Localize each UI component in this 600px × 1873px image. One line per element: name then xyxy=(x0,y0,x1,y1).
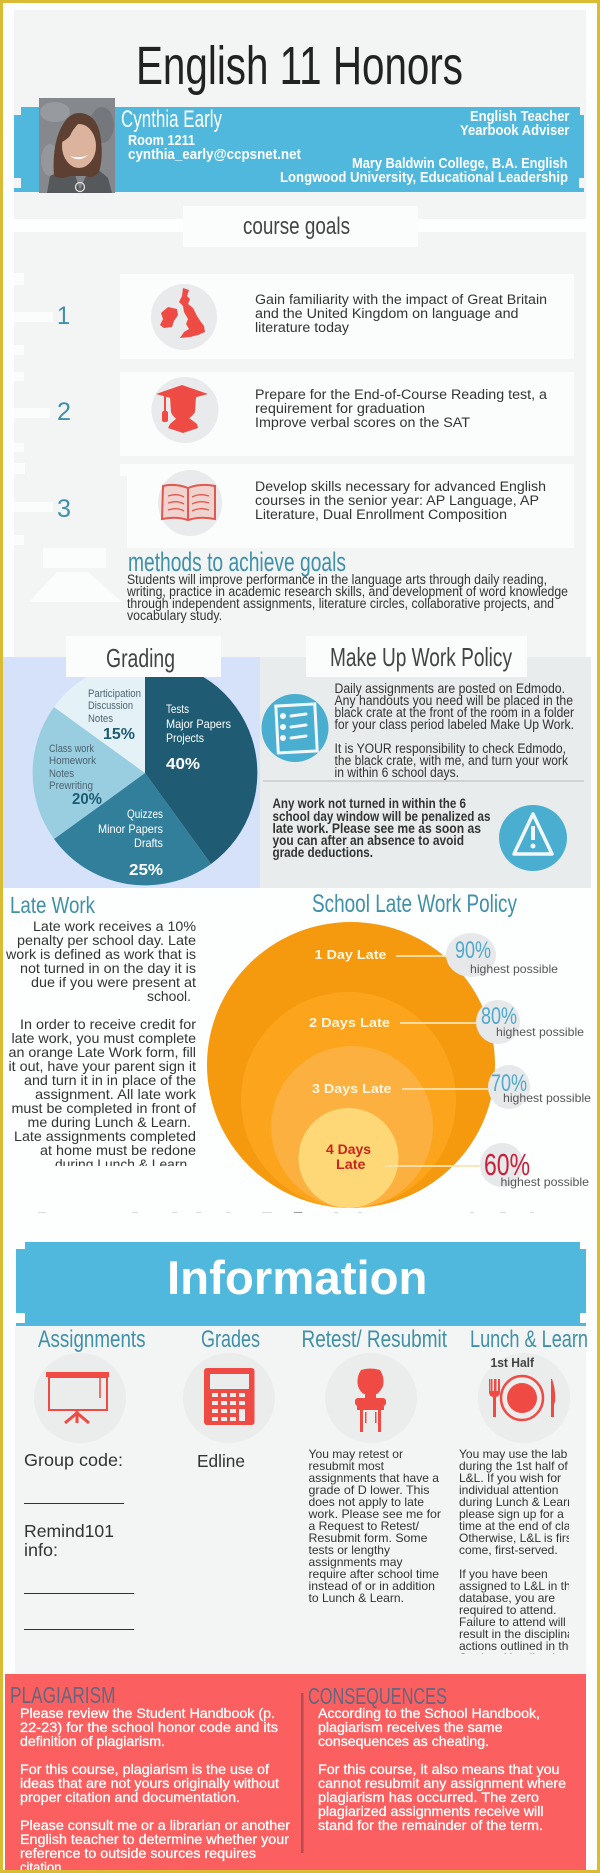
consequences column: cannot resubmit any assignment where xyxy=(318,1775,566,1791)
retest text: instead of or in addition xyxy=(308,1579,435,1593)
retest text: tests or lengthy xyxy=(308,1543,390,1557)
icon: warning xyxy=(499,805,567,871)
make up instructions: Any handouts you need will be placed in the xyxy=(334,693,573,708)
retest text: does not apply to late xyxy=(308,1495,424,1509)
lunch and learn text: individual attention xyxy=(459,1483,558,1497)
consequences column: CONSEQUENCES xyxy=(308,1683,447,1709)
retest text: You may retest or xyxy=(308,1447,403,1461)
3 days late: 3 Days Late xyxy=(312,1081,392,1096)
information section panel xyxy=(15,1325,586,1674)
3 days late xyxy=(312,1070,591,1105)
retest text: grade of D lower. This xyxy=(308,1483,430,1497)
late work warning text: you can after an absence to avoid xyxy=(272,833,464,848)
lunch and learn text: Otherwise, L&L is first xyxy=(459,1531,576,1545)
icon: plate and cutlery xyxy=(489,1376,555,1420)
2 days late: 80% xyxy=(481,1003,517,1030)
slice labels: 40% xyxy=(166,756,200,773)
slice labels: Drafts xyxy=(134,836,163,850)
teacher roles and degrees: Longwood University, Educational Leadership xyxy=(280,169,568,186)
lunch and learn text: assigned to L&L in the xyxy=(459,1579,578,1593)
teacher name and contact: Cynthia Early xyxy=(121,106,222,133)
heading: school late work policy: School Late Work Policy xyxy=(312,890,517,918)
consequences column: According to the School Handbook, xyxy=(318,1705,540,1721)
slice labels: Homework xyxy=(49,755,96,767)
goal 3: 3 xyxy=(57,495,71,523)
column: retest resubmit xyxy=(302,1326,447,1605)
plagiarism column: PLAGIARISM xyxy=(10,1682,116,1708)
late work text: late work, you must complete xyxy=(12,1030,196,1046)
column: assignments xyxy=(24,1326,146,1630)
late work text: In order to receive credit for xyxy=(20,1016,196,1032)
teacher name and contact: cynthia_early@ccpsnet.net xyxy=(128,146,301,163)
late work text: it out, have your parent sign it xyxy=(8,1058,196,1074)
plagiarism column xyxy=(10,1682,290,1873)
make up instructions: in within 6 school days. xyxy=(334,765,459,780)
goal 3 text: Literature, Dual Enrollment Composition xyxy=(255,507,507,522)
assignments info: Group code: xyxy=(24,1450,123,1470)
column: lunch and learn: 1st Half xyxy=(490,1356,535,1370)
late work warning text: late work. Please see me as soon as xyxy=(272,821,481,836)
plagiarism column: English teacher to determine whether your xyxy=(20,1831,289,1847)
retest text xyxy=(307,1447,441,1605)
slice labels: Notes xyxy=(49,768,74,780)
information banner: Information xyxy=(167,1251,428,1304)
late work text: Late Work xyxy=(10,892,95,918)
connector lines xyxy=(385,956,488,1166)
column: lunch and learn xyxy=(459,1326,588,1665)
column: grades: Grades xyxy=(201,1326,260,1353)
late work text: during Lunch & Learn. xyxy=(55,1156,191,1172)
2 days late: 2 Days Late xyxy=(309,1015,390,1030)
plagiarism column: reference to outside sources requires xyxy=(20,1845,256,1861)
1 day late: highest possible xyxy=(470,962,558,976)
teacher roles and degrees xyxy=(280,108,570,186)
goal 1 text: Gain familiarity with the impact of Great Britain xyxy=(255,292,547,307)
methods to achieve goals: methods to achieve goals xyxy=(128,547,346,577)
column: assignments: Assignments xyxy=(38,1326,146,1353)
column: grades xyxy=(183,1326,275,1471)
slice labels: Discussion xyxy=(88,700,133,712)
4 days late: 4 Days xyxy=(326,1141,371,1157)
goal 3 text xyxy=(255,479,546,522)
goal 3 text: Develop skills necessary for advanced English xyxy=(255,479,546,494)
late work text: Late assignments completed xyxy=(14,1128,196,1144)
late work warning text: grade deductions. xyxy=(272,845,373,860)
methods to achieve goals: Students will improve performance in the language arts through daily reading, xyxy=(127,572,547,587)
lunch and learn text: required to attend. xyxy=(459,1603,556,1617)
late work text: school. xyxy=(147,988,191,1004)
icon: chair xyxy=(355,1368,386,1432)
lunch and learn text: come, first-served. xyxy=(459,1543,558,1557)
late work warning text: school day window will be penalized as xyxy=(272,809,490,824)
methods to achieve goals: writing, practice in academic research skills, and development of word knowledge xyxy=(126,584,568,599)
4 days late xyxy=(326,1141,589,1189)
methods to achieve goals: vocabulary study. xyxy=(127,608,222,623)
heading: grading: Grading xyxy=(106,643,175,673)
teacher name and contact: Room 1211 xyxy=(128,132,195,149)
retest text: resubmit most xyxy=(308,1459,385,1473)
late work text xyxy=(5,892,197,1172)
goal 1 text: and the United Kingdom on language and xyxy=(255,306,518,321)
plagiarism column: For this course, plagiarism is the use of xyxy=(20,1761,269,1777)
slice labels: Prewriting xyxy=(49,780,93,792)
assignments info: Remind101 xyxy=(24,1521,114,1541)
lunch and learn text: L&L. If you wish for xyxy=(459,1471,561,1485)
retest text: to Lunch & Learn. xyxy=(308,1591,404,1605)
pie chart xyxy=(33,660,257,885)
retest text: assignments that have a xyxy=(308,1471,439,1485)
heading: make up work policy xyxy=(306,636,527,677)
slice labels: Notes xyxy=(88,713,113,725)
make up instructions: the black crate, with me, and turn your work xyxy=(334,753,568,768)
icon: checklist xyxy=(262,694,328,762)
heading: make up work policy: Make Up Work Policy xyxy=(330,642,512,672)
decorative white step bars xyxy=(14,273,122,602)
lunch and learn text: please sign up for a xyxy=(459,1507,564,1521)
icon: open book xyxy=(162,485,215,520)
retest text: assignments may xyxy=(308,1555,402,1569)
retest text: Resubmit form. Some xyxy=(308,1531,428,1545)
goal 3 text: courses in the senior year: AP Language, AP xyxy=(255,493,539,508)
icon: graduate xyxy=(156,385,208,433)
3 days late: 70% xyxy=(491,1070,527,1097)
slice labels: Minor Papers xyxy=(98,822,163,836)
percent badge circles xyxy=(446,933,530,1187)
panel: make up work policy xyxy=(260,636,591,888)
late work warning text xyxy=(272,796,490,860)
goal 1 xyxy=(57,274,574,359)
lunch and learn text: Student Handbook. xyxy=(459,1651,562,1665)
goal 1 text xyxy=(255,292,547,335)
goal 1: 1 xyxy=(57,302,70,330)
make up instructions xyxy=(334,681,574,780)
late work text: an orange Late Work form, fill xyxy=(8,1044,196,1060)
methods to achieve goals xyxy=(126,547,568,623)
late work text: due if you were present at xyxy=(31,974,196,990)
goal 3 xyxy=(57,464,574,548)
slice labels: Quizzes xyxy=(127,807,163,821)
assignments info xyxy=(24,1450,134,1630)
2 days late xyxy=(309,1003,584,1039)
lunch and learn text: database, you are xyxy=(459,1591,555,1605)
lunch and learn text: during Lunch & Learn, xyxy=(459,1495,577,1509)
assignments info: info: xyxy=(24,1540,58,1560)
teacher banner xyxy=(14,98,584,193)
heading: grading xyxy=(66,636,221,677)
plagiarism column: Please review the Student Handbook (p. xyxy=(20,1705,275,1721)
lunch and learn text: during the 1st half of xyxy=(459,1459,568,1473)
make up instructions: Daily assignments are posted on Edmodo. xyxy=(334,681,565,696)
teacher roles and degrees: Mary Baldwin College, B.A. English xyxy=(352,155,568,172)
4 days late: Late xyxy=(336,1156,366,1172)
4 days late: highest possible xyxy=(500,1175,589,1189)
retest text: a Request to Retest/ xyxy=(308,1519,420,1533)
concentric late work chart xyxy=(207,922,591,1208)
slice labels: Participation xyxy=(88,688,141,700)
goal 2 text: Prepare for the End-of-Course Reading test, a xyxy=(255,387,548,402)
plagiarism column: Please consult me or a librarian or another xyxy=(20,1817,290,1833)
late work text: must be completed in front of xyxy=(12,1100,196,1116)
2 days late: highest possible xyxy=(496,1025,584,1039)
slice labels: Projects xyxy=(166,731,204,745)
icon: UK map xyxy=(160,288,205,338)
goal 2 text xyxy=(255,387,548,430)
late work text: and turn it in in place of the xyxy=(24,1072,196,1088)
title: English 11 Honors xyxy=(136,36,463,96)
panel: plagiarism and consequences xyxy=(5,1674,586,1873)
late work text: work is defined as work that is xyxy=(5,946,196,962)
lunch and learn text xyxy=(459,1450,569,1654)
teacher photo xyxy=(39,98,115,193)
lunch and learn text: actions outlined in the xyxy=(459,1639,575,1653)
plagiarism column: proper citation and documentation. xyxy=(20,1789,240,1805)
plagiarism column: 22-23) for the school honor code and its xyxy=(20,1719,278,1735)
consequences column xyxy=(308,1683,566,1833)
slice labels: Major Papers xyxy=(166,717,231,731)
late work text: at home must be redone xyxy=(40,1142,196,1158)
heading: course goals: course goals xyxy=(243,213,350,240)
goal 2: 2 xyxy=(57,398,71,426)
lunch and learn text: time at the end of class. xyxy=(459,1519,586,1533)
goal 2 xyxy=(57,372,574,456)
teacher name and contact xyxy=(121,106,301,163)
panel: grading xyxy=(3,636,260,888)
1 day late xyxy=(314,937,558,976)
retest text: require after school time xyxy=(308,1567,439,1581)
late work warning text: Any work not turned in within the 6 xyxy=(272,796,466,811)
3 days late: highest possible xyxy=(503,1091,591,1105)
teacher roles and degrees: English Teacher xyxy=(470,108,570,125)
goal 2 text: Improve verbal scores on the SAT xyxy=(255,415,470,430)
late work text: Late work receives a 10% xyxy=(33,918,196,934)
lunch and learn text: You may use the lab xyxy=(459,1447,568,1461)
consequences column: consequences as cheating. xyxy=(318,1733,489,1749)
icon: projector screen xyxy=(46,1372,109,1423)
plagiarism column: definition of plagiarism. xyxy=(20,1733,165,1749)
late work text: assignment. All late work xyxy=(35,1086,197,1102)
make up instructions: black crate at the front of the room in a folder xyxy=(334,705,574,720)
slice labels xyxy=(49,688,231,879)
slice labels: Class work xyxy=(49,743,94,755)
retest text: work. Please see me for xyxy=(307,1507,441,1521)
consequences column: stand for the remainder of the term. xyxy=(318,1817,543,1833)
consequences column: For this course, it also means that you xyxy=(318,1761,560,1777)
heading: course goals xyxy=(183,206,418,247)
lunch and learn text: result in the disciplinary xyxy=(459,1627,584,1641)
consequences column: plagiarism receives the same xyxy=(318,1719,503,1735)
1 day late: 1 Day Late xyxy=(314,947,386,962)
plagiarism column: ideas that are not yours originally without xyxy=(20,1775,279,1791)
consequences column: plagiarism has occurred. The zero xyxy=(318,1789,539,1805)
consequences column: plagiarized assignments receive will xyxy=(318,1803,544,1819)
column: retest resubmit: Retest/ Resubmit xyxy=(302,1326,447,1353)
information banner xyxy=(16,1242,586,1326)
4 days late: 60% xyxy=(484,1147,530,1182)
late work text: penalty per school day. Late xyxy=(17,932,196,948)
column: grades: Edline xyxy=(197,1451,245,1471)
lunch and learn text: If you have been xyxy=(459,1567,548,1581)
slice labels: 25% xyxy=(129,862,163,879)
goal 1 text: literature today xyxy=(255,320,349,335)
make up instructions: It is YOUR responsibility to check Edmodo, xyxy=(334,741,566,756)
slice labels: 15% xyxy=(103,726,135,743)
slice labels: Tests xyxy=(166,702,189,716)
methods to achieve goals: through independent assignments, literature circles, collaborative projects, and xyxy=(127,596,554,611)
make up instructions: for your class period labeled Make Up Work. xyxy=(334,717,574,732)
1 day late: 90% xyxy=(455,937,491,964)
icon: calculator xyxy=(204,1368,254,1425)
teacher roles and degrees: Yearbook Adviser xyxy=(460,122,570,139)
late work text: me during Lunch & Learn. xyxy=(28,1114,191,1130)
goal 2 text: requirement for graduation xyxy=(255,401,425,416)
lunch and learn text: Failure to attend will xyxy=(459,1615,566,1629)
late work text: not turned in on the day it is xyxy=(20,960,196,976)
slice labels: 20% xyxy=(72,791,102,808)
